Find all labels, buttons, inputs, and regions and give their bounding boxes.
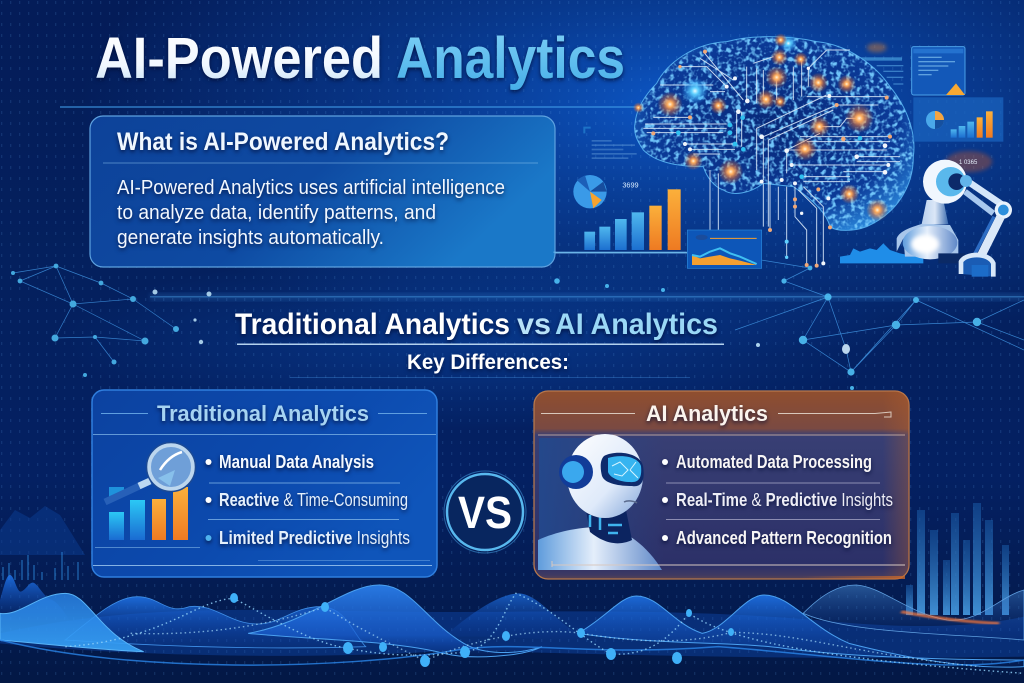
panel body text: generate insights automatically. [117,227,384,249]
glowing nodes [633,33,889,221]
panel title: Traditional Analytics [157,401,369,426]
panel body text: AI-Powered Analytics uses artificial intelligence [117,177,505,199]
bullet list [206,452,410,548]
dashboard screen [912,47,965,95]
panel heading: What is AI-Powered Analytics? [117,128,449,156]
number label: 3699 [622,181,639,190]
VS badge [444,471,526,553]
chart panel right [913,97,1003,142]
bullet list: Automated Data Processing [676,452,872,472]
circuit nodes [651,50,892,268]
panel body text: to analyze data, identify patterns, and [117,202,436,224]
bullet list [662,452,893,548]
panel title [541,401,891,426]
bar chart left [584,189,681,250]
area chart panel [687,230,762,268]
network: left constellation [11,264,212,377]
title [95,26,625,91]
section heading: AI Analytics [555,308,718,341]
sub heading: Key Differences: [407,351,569,374]
panel: what is AI-powered analytics [90,116,555,267]
robot arm [897,160,1012,277]
bullet list: Real-Time & Predictive Insights [676,490,893,510]
title: Analytics [396,26,625,91]
label with glow: 1 0365 [959,160,978,166]
panel body text [117,177,505,249]
section heading: Traditional Analytics [235,308,510,341]
title: AI-Powered [95,26,383,91]
bullet list: Advanced Pattern Recognition [676,528,892,548]
section heading [235,308,724,345]
panel: AI analytics [534,391,909,579]
icon: bar chart with magnifier [105,442,196,540]
bottom mini chart [840,243,923,263]
panel title: AI Analytics [646,401,768,426]
label with glow [946,151,992,172]
section heading: vs [517,308,551,341]
network: right constellation [554,250,1024,390]
robot head [538,434,664,570]
text block left [583,127,637,159]
text lines top right [857,57,903,85]
VS badge: VS [458,487,512,538]
bullet list: Manual Data Analysis [219,452,374,472]
panel: traditional analytics [92,390,437,577]
wave data points [230,593,734,667]
decoration: left mountains and bars [0,506,85,555]
waves [0,503,1024,673]
circuit traces [643,50,900,265]
bullet list: Reactive & Time-Consuming [219,490,408,510]
brain [633,33,914,268]
pie chart left [573,175,607,208]
decoration: right bars [906,503,1009,615]
illustration: brain, charts and robot arm [553,33,1012,277]
bullet list: Limited Predictive Insights [219,528,410,548]
